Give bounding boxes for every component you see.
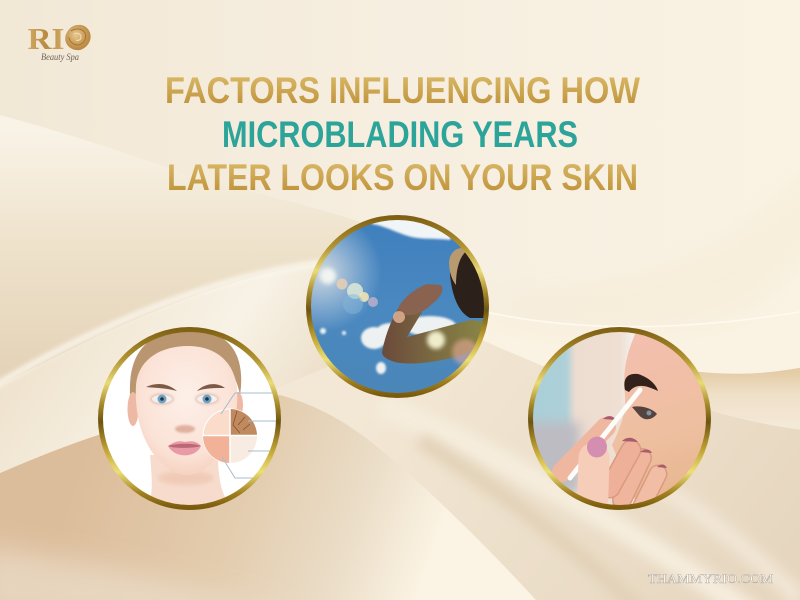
face — [612, 334, 706, 500]
lips — [168, 441, 201, 455]
top cloud — [370, 220, 452, 242]
fingertips nails — [622, 438, 667, 468]
callout lines — [221, 393, 276, 478]
icon: gold rose — [65, 25, 91, 50]
hair — [130, 332, 242, 394]
ears — [128, 392, 138, 426]
sun flare on shoulder — [427, 331, 445, 349]
index finger — [562, 427, 606, 472]
logo wordmark letters: RI — [28, 21, 64, 56]
thumb — [592, 458, 594, 525]
nose — [175, 425, 195, 433]
website watermark: THAMMYRIO.COM — [648, 571, 773, 586]
logo tagline: Beauty Spa — [41, 52, 79, 62]
hair — [450, 252, 484, 318]
fingernail — [587, 436, 607, 458]
photo circle: sun exposure, woman shielding eyes — [306, 212, 490, 400]
neck — [150, 455, 225, 505]
photo circle: skin type, woman's face — [100, 330, 278, 510]
skin magnifier — [202, 408, 242, 461]
logo: RIO Beauty Spa — [28, 21, 91, 62]
eyebrow — [624, 374, 658, 392]
fingers — [610, 450, 658, 510]
lens flares — [320, 268, 378, 314]
cotton swab — [570, 390, 640, 478]
face — [136, 346, 237, 475]
title line 2: MICROBLADING YEARS — [222, 114, 578, 155]
title line 1: FACTORS INFLUENCING HOW — [165, 70, 640, 111]
lower cloud — [320, 316, 456, 374]
arm — [382, 308, 483, 364]
hands — [398, 284, 442, 315]
title line 3: LATER LOOKS ON YOUR SKIN — [167, 157, 638, 198]
eye — [632, 406, 657, 419]
eyes — [150, 393, 174, 405]
brows — [146, 384, 225, 391]
title — [165, 70, 640, 198]
photo circle: aftercare, cotton swab on eyebrow — [528, 327, 711, 510]
